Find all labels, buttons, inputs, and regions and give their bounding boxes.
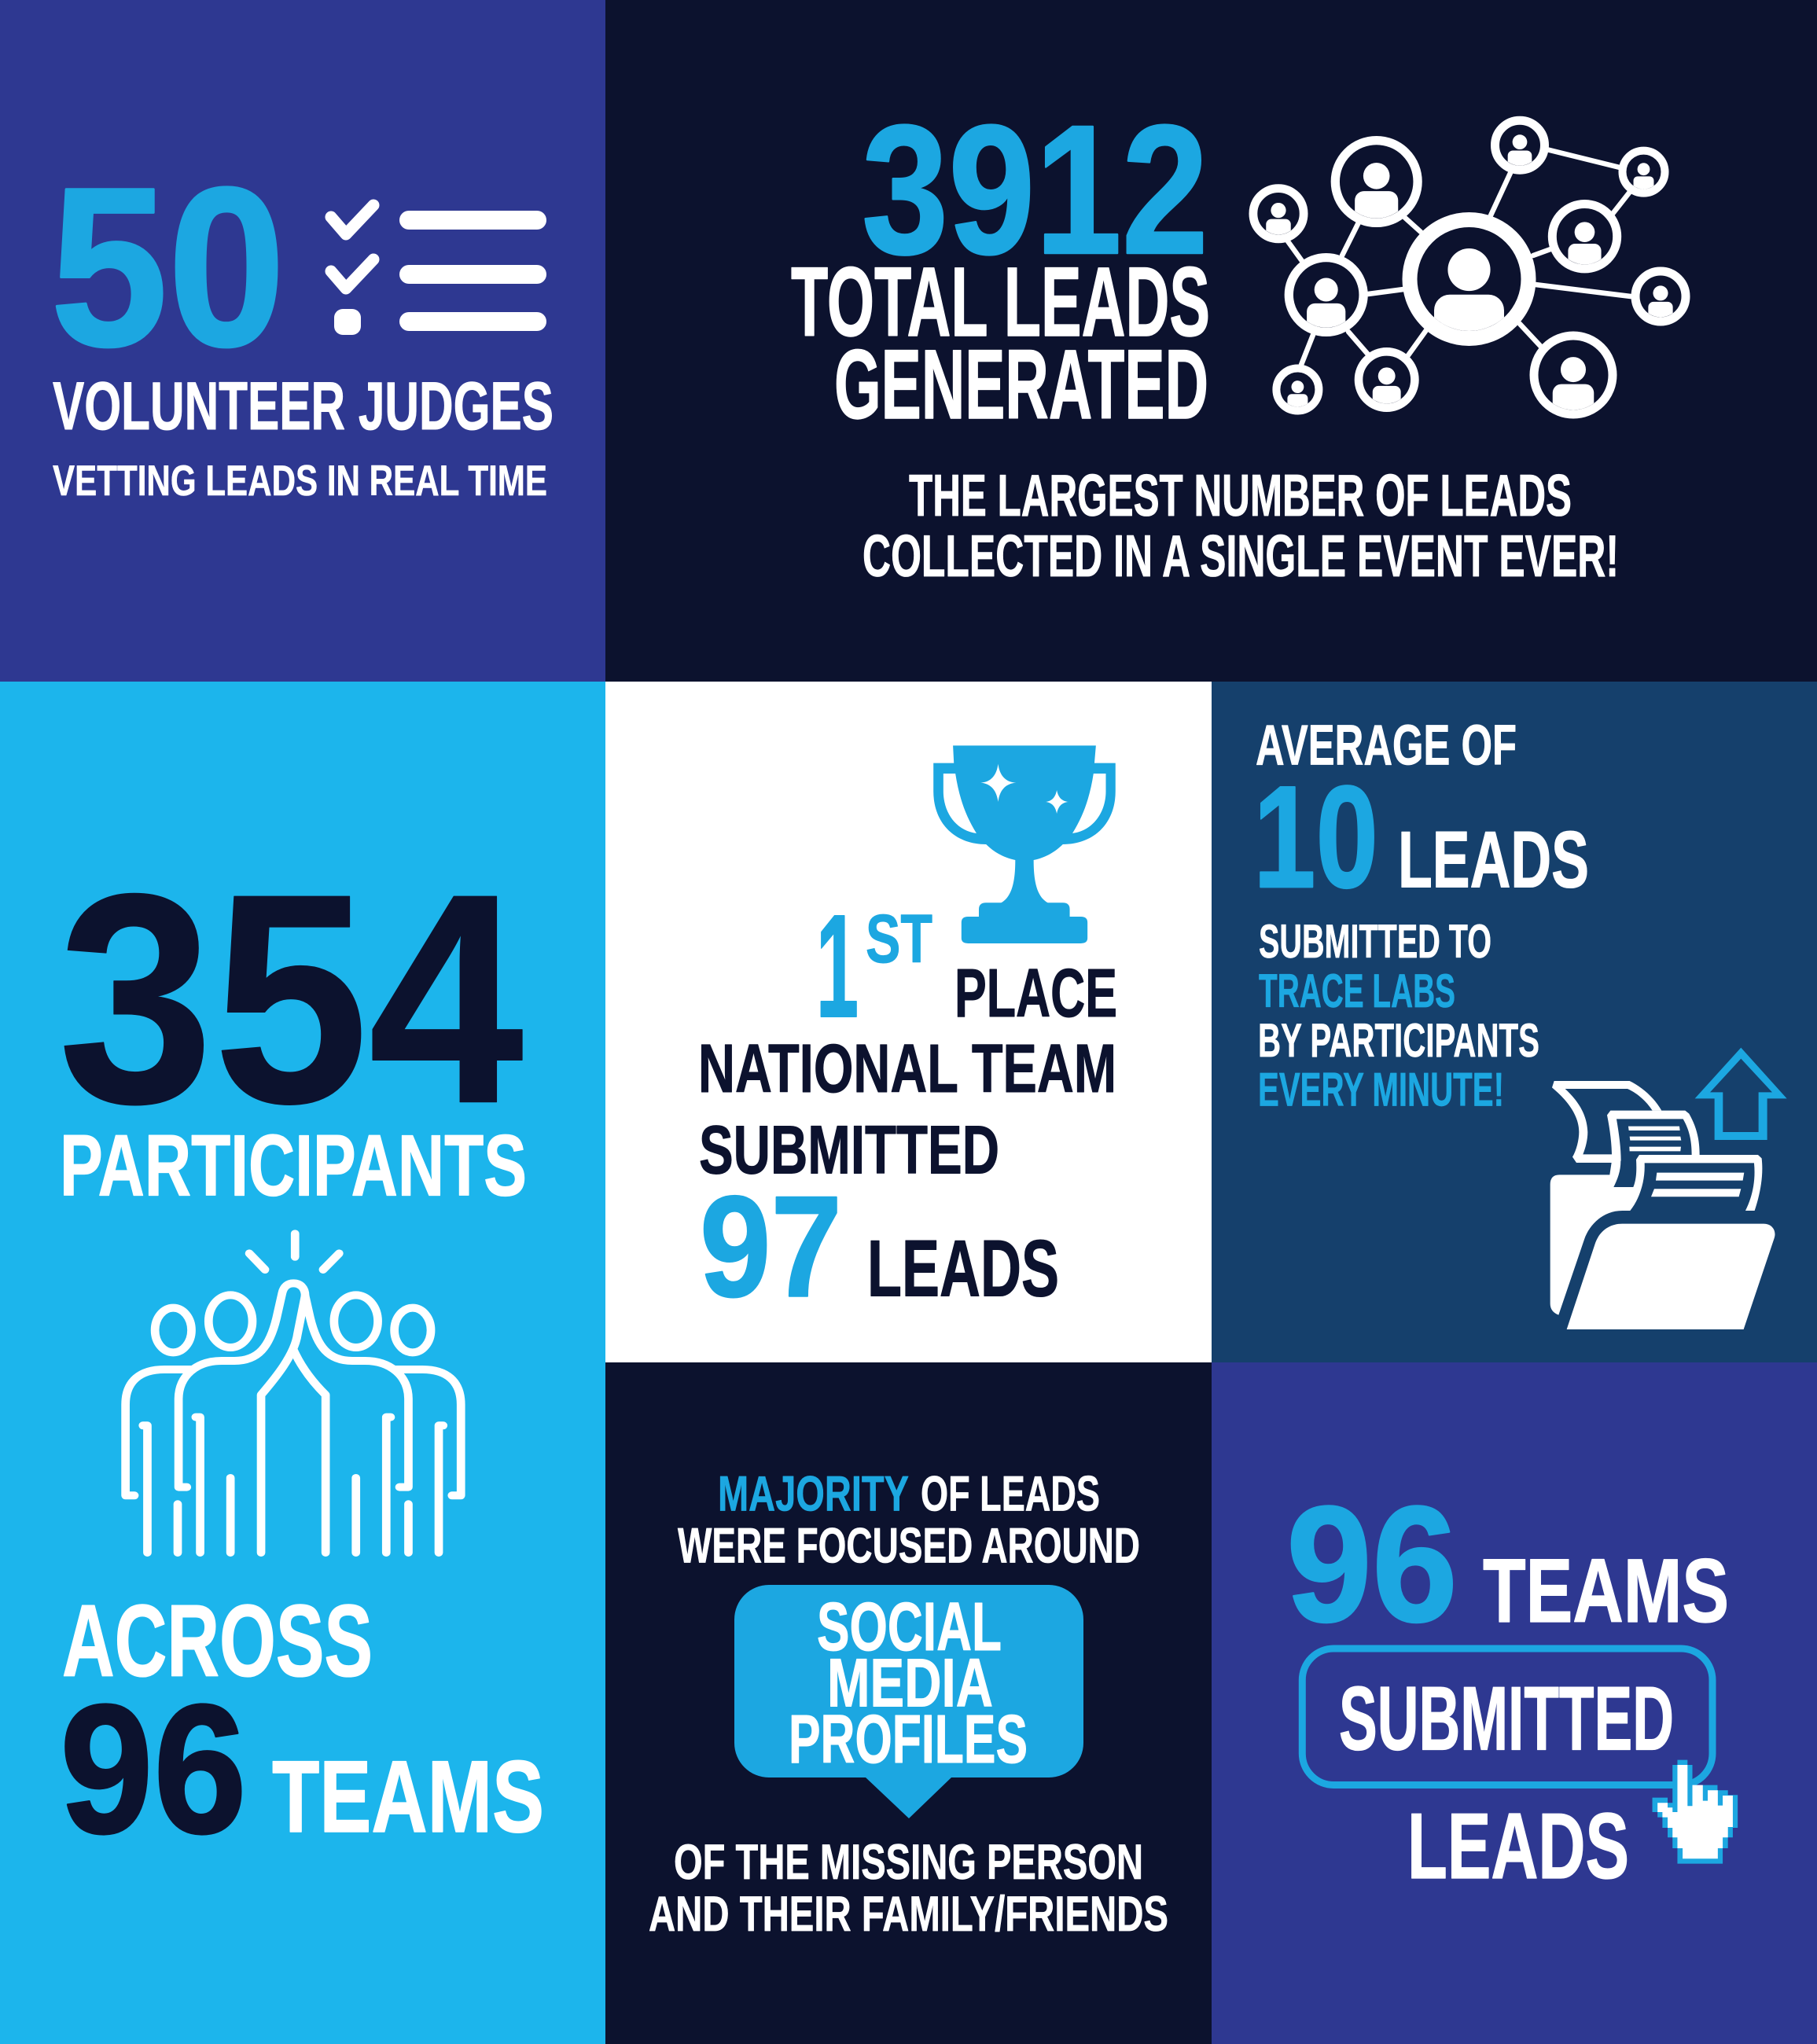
text: by participants: BY PARTICIPANTS (1258, 1013, 1539, 1067)
stat: 96: 96 (60, 1666, 247, 1872)
stat: 96: 96 (1286, 1472, 1458, 1656)
text: were focused around: WERE FOCUSED AROUND (678, 1518, 1140, 1573)
text: trace labs: TRACE LABS (1259, 964, 1455, 1017)
heading: leads: LEADS (1398, 814, 1589, 904)
heading: leads: LEADS (867, 1224, 1059, 1314)
stat: 3912: 3912 (862, 86, 1208, 292)
icon: trophy (933, 745, 1116, 943)
icon: folder with papers (1550, 1081, 1775, 1329)
text: family and friends: AND THEIR FAMILY/FRIENDS (649, 1887, 1168, 1942)
heading: participants: PARTICIPANTS (60, 1118, 527, 1215)
panel: teams submitted (1212, 1362, 1817, 2044)
text: submitted to: SUBMITTED TO (1259, 914, 1491, 968)
icon: pointer hand (1653, 1760, 1738, 1864)
heading: leads: LEADS (1407, 1794, 1629, 1899)
heading: average of: AVERAGE OF (1256, 715, 1517, 778)
callout: speech bubble: MEDIA (827, 1645, 993, 1722)
stat: 1st (816, 885, 932, 1048)
button: submitted (1302, 1649, 1712, 1785)
icon: upload arrow (1695, 1048, 1787, 1140)
heading: national team: NATIONAL TEAM (698, 1031, 1116, 1107)
stat: 354: 354 (58, 832, 525, 1166)
stat: 1st: 1 (816, 885, 859, 1048)
stat: 10: 10 (1253, 756, 1378, 918)
heading: total leads: TOTAL LEADS (791, 248, 1210, 357)
text: vetting leads: VETTING LEADS IN REAL TIME (53, 456, 547, 505)
text: of the missing person: OF THE MISSING PERSON (674, 1835, 1143, 1890)
text: every minute: EVERY MINUTE! (1258, 1063, 1504, 1116)
panel: first place (605, 682, 1212, 1362)
icon: checklist (331, 205, 546, 335)
callout: speech bubble (734, 1585, 1083, 1818)
heading: generated: GENERATED (834, 330, 1208, 439)
heading: place: PLACE (954, 955, 1117, 1031)
stat: 1st: ST (866, 901, 932, 977)
heading: across: ACROSS (62, 1583, 373, 1698)
text: majority of leads (718, 1467, 1100, 1522)
panel: average leads (1212, 682, 1817, 1362)
heading: teams: TEAMS (272, 1739, 544, 1854)
heading: submitted: SUBMITTED (699, 1112, 999, 1189)
text: majority of leads: OF LEADS (921, 1467, 1100, 1522)
stat: 50: 50 (50, 141, 285, 394)
panel: participants (0, 682, 605, 2044)
panel: total leads (605, 0, 1817, 682)
text: majority of leads: MAJORITY (718, 1467, 909, 1522)
panel: volunteer judges (0, 0, 605, 682)
callout: speech bubble: SOCIAL (817, 1589, 1002, 1665)
heading: teams: TEAMS (1483, 1541, 1729, 1641)
icon: team high five (126, 1233, 461, 1553)
icon: people network (1253, 120, 1686, 414)
callout: speech bubble: PROFILES (789, 1701, 1028, 1777)
panel: social media focus (605, 1362, 1212, 2044)
stat: 97: 97 (700, 1166, 842, 1327)
heading: volunteer judges: VOLUNTEER JUDGES (53, 369, 554, 444)
